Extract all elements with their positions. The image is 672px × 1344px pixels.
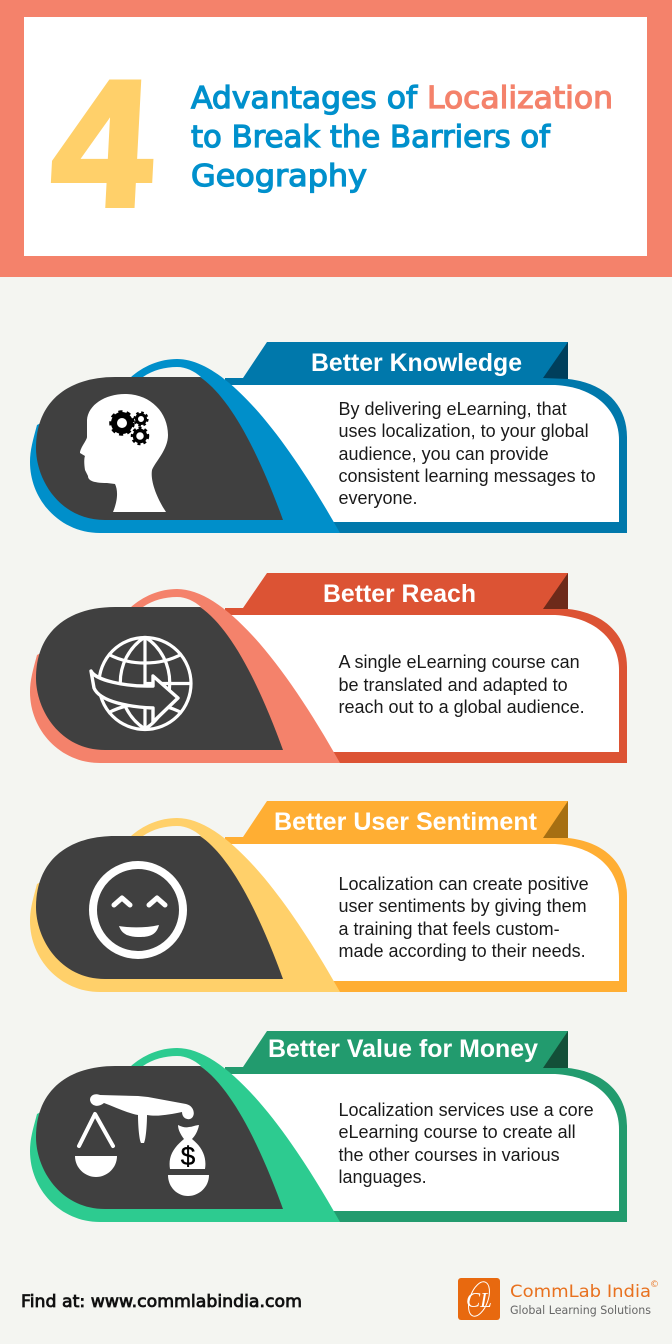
text block [338, 399, 596, 508]
text block: languages. [338, 1167, 427, 1187]
icon: smiling face [93, 865, 183, 955]
big number 4: 4 [48, 44, 157, 243]
logo name: CommLab India [510, 1282, 651, 1302]
text block [338, 1100, 594, 1187]
panel: Better Reach [30, 573, 627, 763]
text block [338, 652, 585, 717]
text block: Localization can create positive [338, 874, 589, 894]
logo mark: CL [466, 1288, 492, 1312]
text block: By delivering eLearning, that [338, 399, 567, 419]
heading: Better User Sentiment [274, 808, 538, 836]
text block: the other courses in various [338, 1145, 560, 1165]
text block: made according to their needs. [338, 941, 586, 961]
header panel [0, 0, 672, 277]
logo tagline: Global Learning Solutions [510, 1303, 651, 1317]
text block [338, 874, 589, 961]
title [191, 81, 613, 194]
text block: everyone. [338, 488, 418, 508]
title: Geography [191, 159, 367, 194]
logo [458, 1278, 659, 1320]
icon: head with gears [80, 394, 168, 512]
dollar sign: $ [181, 1141, 196, 1171]
text block: uses localization, to your global [338, 421, 589, 441]
copyright mark: © [650, 1280, 659, 1290]
footer link text: Find at: www.commlabindia.com [21, 1292, 302, 1312]
title: to Break the Barriers of [191, 120, 551, 155]
logo mark [458, 1278, 500, 1320]
panel: Better User Sentiment [30, 801, 627, 992]
panel: Better Knowledge [30, 342, 627, 533]
text block: Localization services use a core [338, 1100, 594, 1120]
heading: Better Value for Money [268, 1035, 538, 1063]
title: Advantages of Localization [191, 81, 613, 116]
text block: a training that feels custom- [338, 919, 560, 939]
text block: be translated and adapted to [338, 675, 568, 695]
icon: balance scale with money bag [75, 1094, 209, 1196]
text block: audience, you can provide [338, 444, 549, 464]
text block: eLearning course to create all [338, 1122, 576, 1142]
icon: globe with arrow [91, 637, 191, 730]
text block: A single eLearning course can [338, 652, 580, 672]
panel: Better Value for Money [30, 1031, 627, 1222]
heading: Better Reach [323, 580, 476, 608]
heading: Better Knowledge [311, 349, 522, 377]
text block: reach out to a global audience. [338, 697, 585, 717]
text block: consistent learning messages to [338, 466, 596, 486]
text block: user sentiments by giving them [338, 896, 587, 916]
